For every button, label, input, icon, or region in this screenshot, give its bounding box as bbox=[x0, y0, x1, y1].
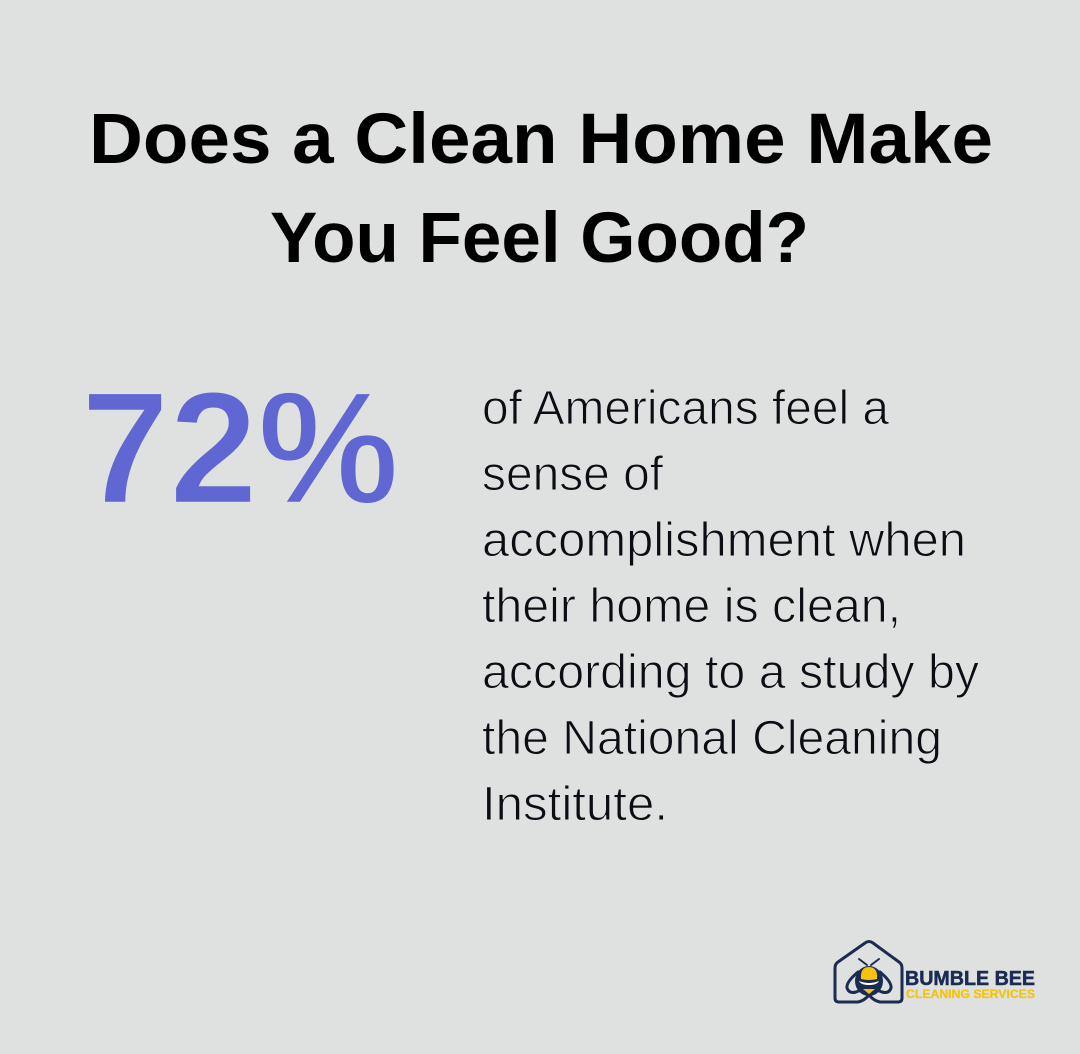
description text: their home is clean, bbox=[482, 580, 901, 633]
title: You Feel Good? bbox=[270, 199, 809, 278]
description text: accomplishment when bbox=[482, 514, 966, 567]
description text: the National Cleaning bbox=[482, 712, 942, 765]
logo tagline: CLEANING SERVICES bbox=[906, 987, 1035, 1001]
description text: Institute. bbox=[482, 778, 668, 831]
title bbox=[89, 100, 993, 278]
description text: of Americans feel a bbox=[482, 382, 889, 435]
logo: Bumble Bee Cleaning Services bbox=[835, 942, 1035, 1002]
statistic: 72%: 72% bbox=[81, 358, 399, 537]
title: Does a Clean Home Make bbox=[89, 100, 993, 179]
description text bbox=[482, 382, 979, 831]
description text: according to a study by bbox=[482, 646, 979, 699]
icon: house with bee bbox=[835, 942, 902, 1002]
description text: sense of bbox=[482, 448, 664, 501]
logo wordmark: BUMBLE BEE bbox=[905, 968, 1035, 990]
